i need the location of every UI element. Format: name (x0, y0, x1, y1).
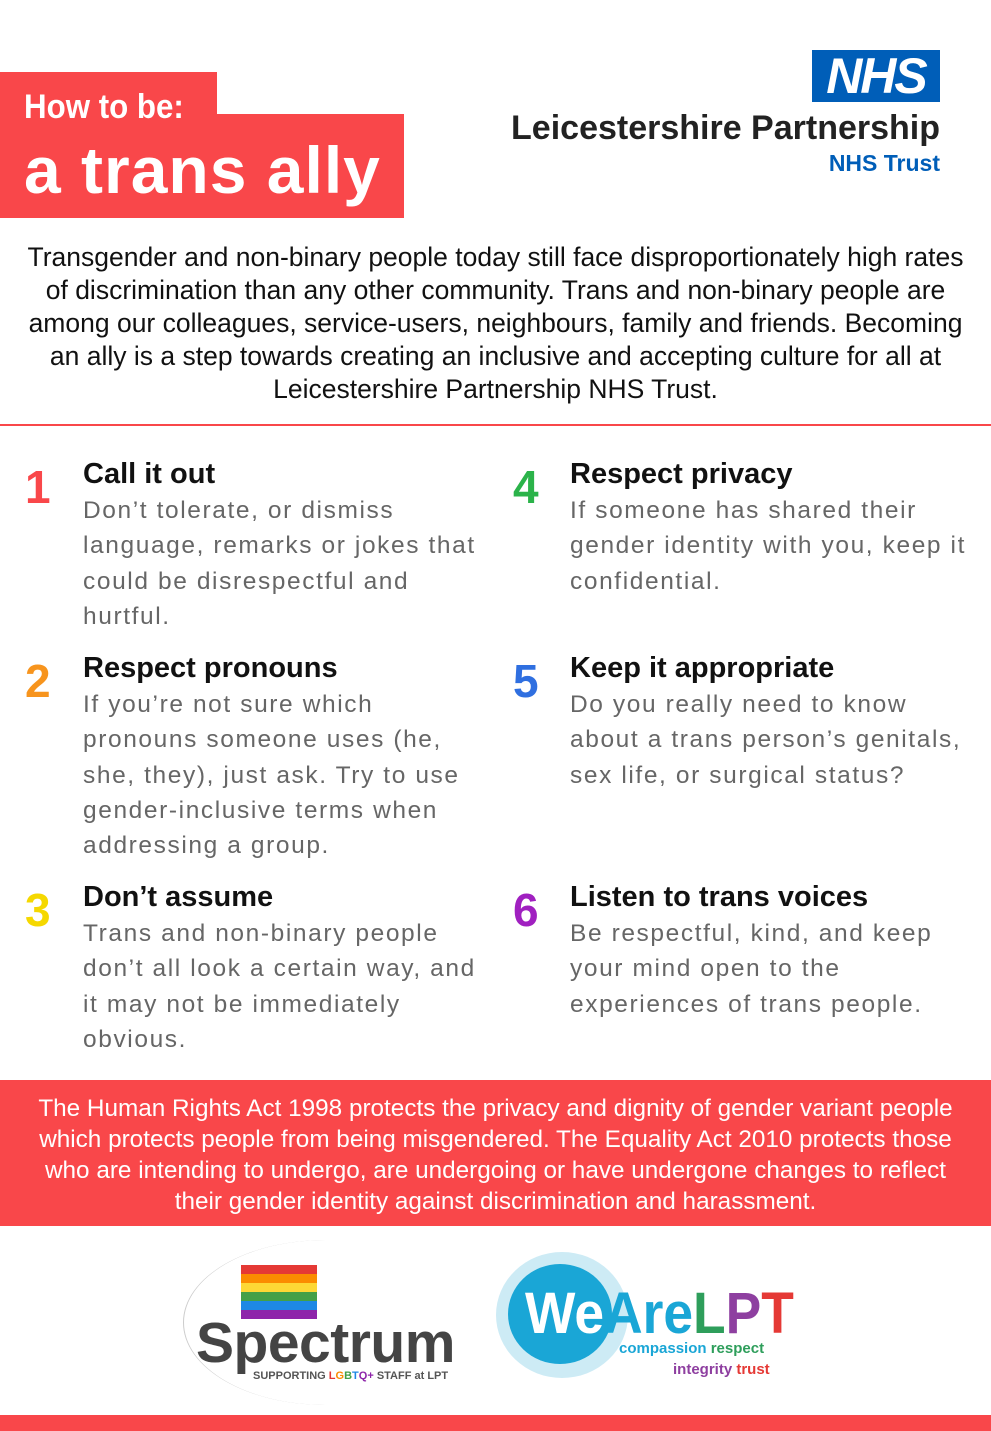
intro text: Transgender and non-binary people today still face disproportionately high rates of discrimination than any other community. Trans and non-binary people are among our colleagues, service-users, neighbours, family and friends. Becoming an ally is a step towards creating an inclusive and accepting culture for all at Leicestershire Partnership NHS Trust. (28, 242, 963, 404)
item 4: If someone has shared their gender identity with you, keep it confidential. (570, 497, 966, 595)
number 5: 5 (513, 655, 539, 707)
number 6: 6 (513, 884, 539, 936)
title block: a trans ally (24, 133, 381, 207)
logo: Spectrum: Spectrum (196, 1311, 455, 1375)
item 4: Respect privacy (570, 458, 792, 490)
number 2: 2 (25, 655, 51, 707)
number 4: 4 (513, 461, 539, 513)
number 1: 1 (25, 461, 51, 513)
item 5: Keep it appropriate (570, 652, 834, 684)
item 3: Don’t assume (83, 881, 273, 913)
logo: NHS Leicestershire Partnership (511, 48, 940, 176)
logo: Spectrum (183, 1240, 455, 1405)
logo: NHS Leicestershire Partnership: NHS (826, 48, 926, 104)
logo: WeAreLPT (496, 1252, 794, 1378)
item 1: Call it out (83, 458, 215, 490)
title block (0, 72, 404, 218)
item 1: Don’t tolerate, or dismiss language, remarks or jokes that could be disrespectful and hurtful. (83, 497, 476, 630)
item 3: Trans and non-binary people don’t all look a certain way, and it may not be immediately obvious. (83, 920, 476, 1053)
item 2: Respect pronouns (83, 652, 338, 684)
title block: How to be: (24, 88, 184, 126)
item 6: Be respectful, kind, and keep your mind open to the experiences of trans people. (570, 920, 932, 1018)
item 5: Do you really need to know about a trans person’s genitals, sex life, or surgical status? (570, 691, 961, 789)
item 2: If you’re not sure which pronouns someone uses (he, she, they), just ask. Try to use gender-inclusive terms when addressing a group. (83, 691, 460, 859)
logo: WeAreLPT: compassion respect (619, 1340, 764, 1357)
legal callout band: The Human Rights Act 1998 protects the privacy and dignity of gender variant people which protects people from being misgendered. The Equality Act 2010 protects those who are intending to undergo, are undergoing or have undergone changes to reflect their gender identity against discrimination and harassment. (38, 1095, 953, 1215)
number 3: 3 (25, 884, 51, 936)
logo: NHS Leicestershire Partnership: Leicestershire Partnership (511, 109, 940, 147)
logo: WeAreLPT: WeAreLPT (525, 1281, 794, 1346)
logo: Spectrum: SUPPORTING LGBTQ+ STAFF at LPT (253, 1370, 448, 1382)
logo: WeAreLPT: integrity trust (673, 1361, 770, 1378)
item 6: Listen to trans voices (570, 881, 868, 913)
logo: NHS Leicestershire Partnership: NHS Trust (829, 150, 940, 176)
